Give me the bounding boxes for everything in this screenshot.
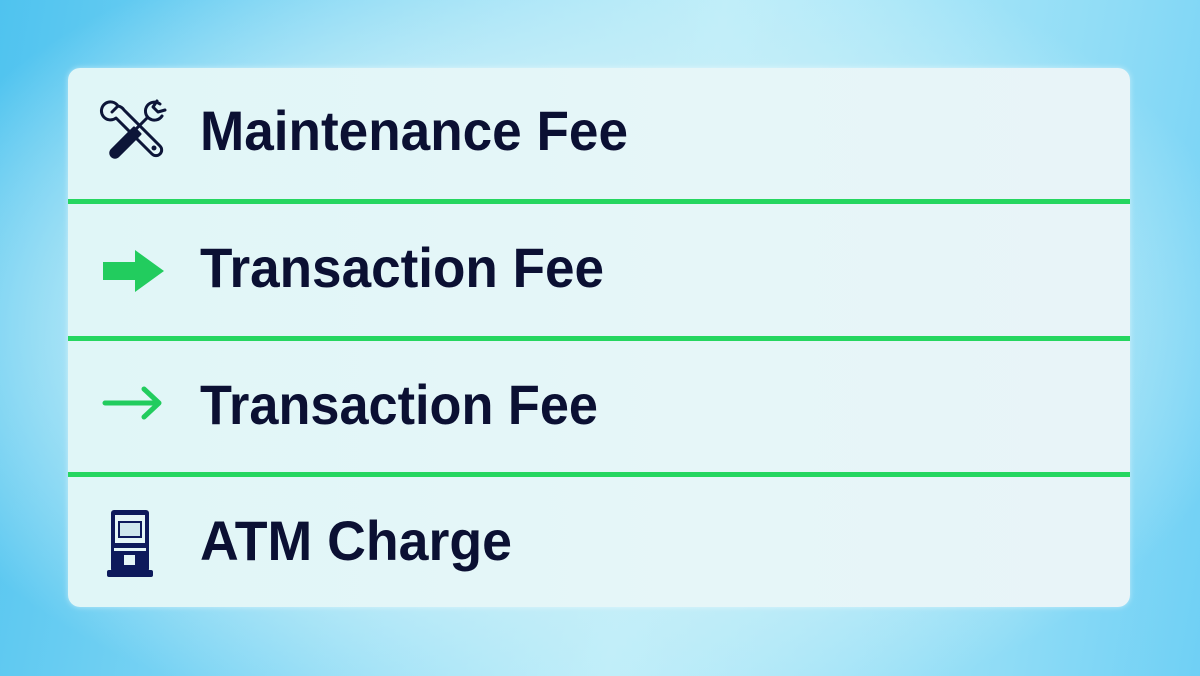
text: Transaction Fee: Transaction Fee <box>200 236 604 299</box>
icon: thick green arrow <box>103 250 164 292</box>
text: ATM Charge: ATM Charge <box>200 509 512 572</box>
icon: thin green arrow <box>105 389 159 417</box>
icon: wrench and screwdriver <box>101 101 165 157</box>
text: Transaction Fee 2: Transaction Fee <box>200 373 598 436</box>
icon: ATM <box>107 510 153 577</box>
text: Maintenance Fee: Maintenance Fee <box>200 99 628 162</box>
panel: fee list <box>68 68 1130 607</box>
